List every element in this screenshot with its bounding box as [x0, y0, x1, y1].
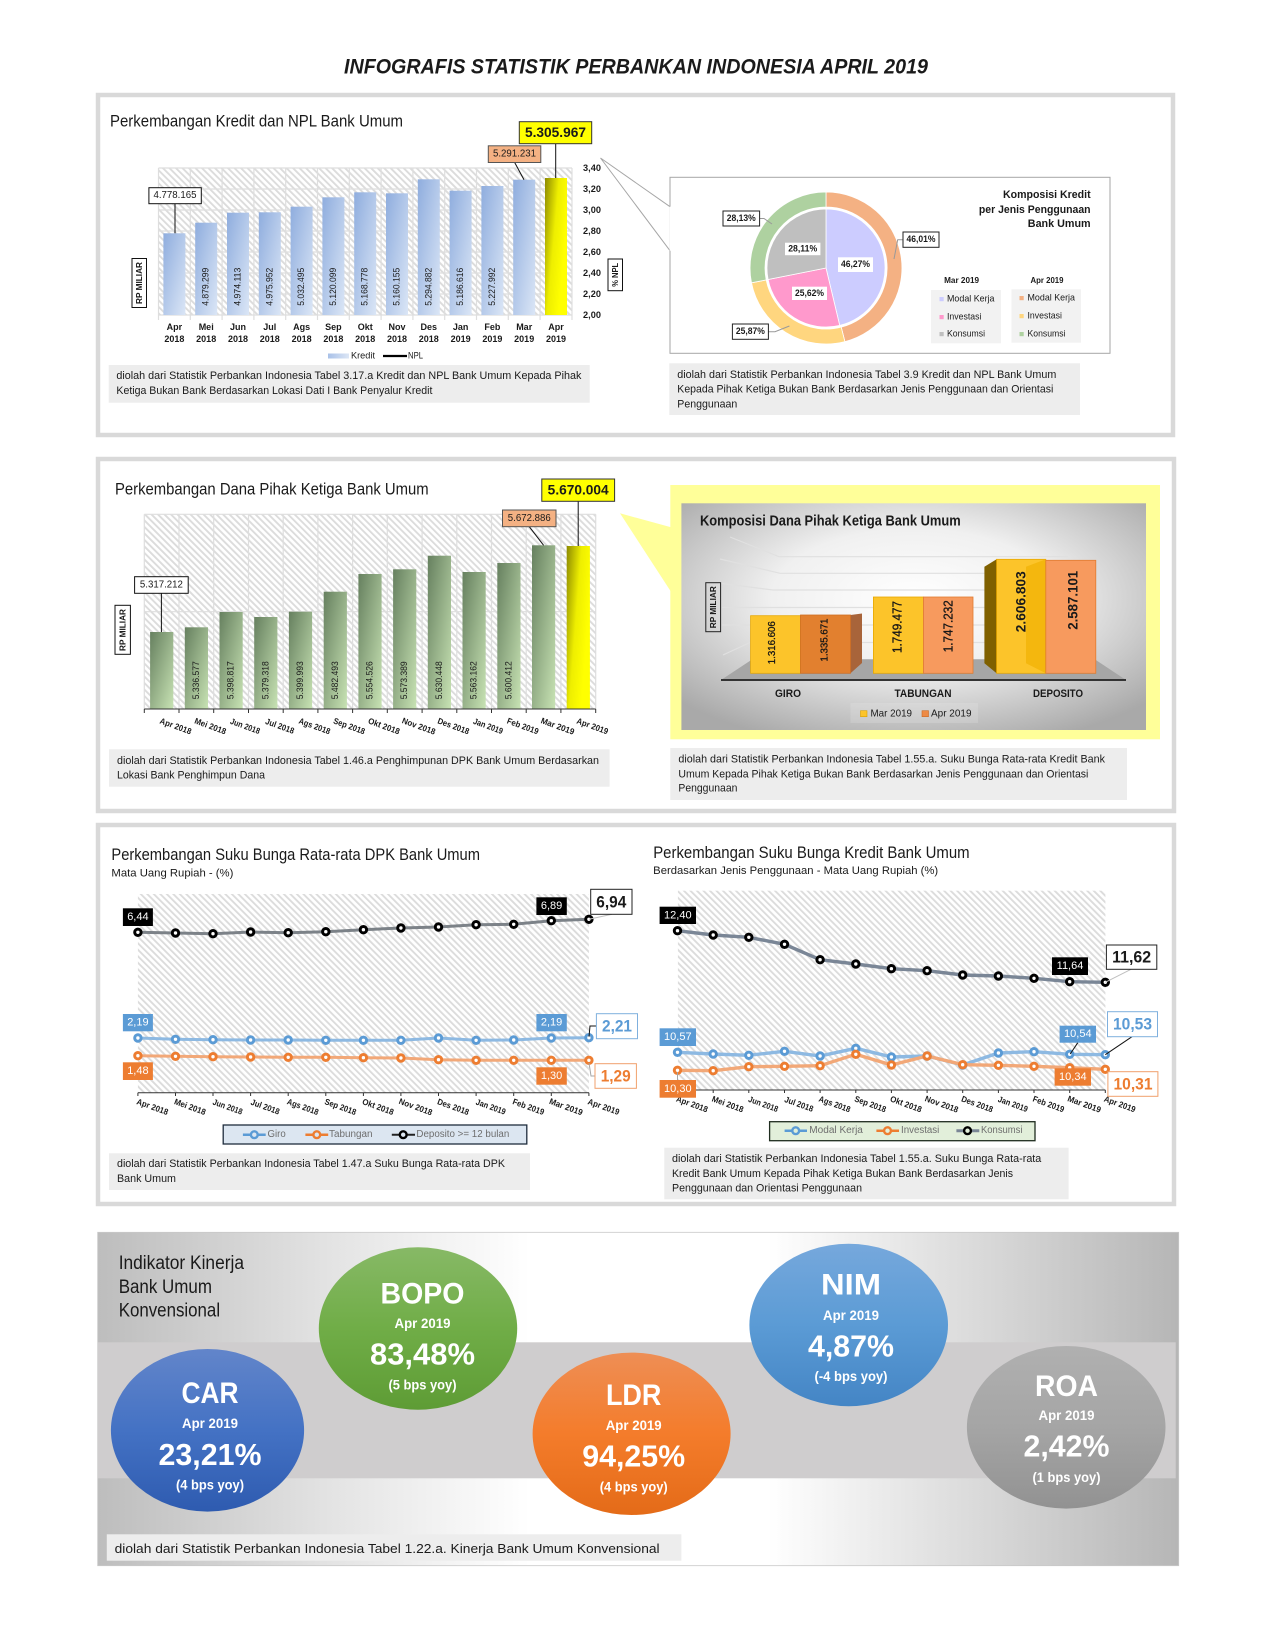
- bar chart: dpk: 5.398.817: [226, 661, 237, 699]
- metric: nim: (-4 bps yoy): [814, 1369, 888, 1384]
- heading: indikator: Bank Umum: [119, 1277, 212, 1298]
- bar chart: kredit: Okt: [358, 322, 373, 332]
- label: 25,62: 25,62%: [795, 288, 824, 299]
- bar chart: kredit: 5.186.616: [455, 268, 466, 306]
- line chart: suku bunga dpk: Okt 2018: [361, 1096, 396, 1117]
- bar chart: kredit: Apr: [548, 322, 564, 332]
- metric: bopo: BOPO: [380, 1278, 464, 1310]
- line chart: suku bunga kredit: Okt 2018: [889, 1094, 923, 1114]
- line chart: suku bunga dpk: Feb 2019: [511, 1096, 546, 1117]
- label: 46,27: 46,27%: [841, 259, 870, 270]
- note: kredit: [109, 365, 590, 403]
- legend: suku bunga kredit: Konsumsi: [981, 1125, 1022, 1136]
- bar chart: dpk: 5.630.448: [434, 661, 445, 699]
- data labels: suku bunga dpk: 1,48: [127, 1065, 149, 1077]
- legend: suku bunga kredit: Investasi: [901, 1125, 939, 1136]
- panel: komposisi dpk: [670, 485, 1160, 739]
- 3d bar chart: 2.587.101: [1064, 571, 1080, 630]
- label: 28,11: 28,11%: [788, 244, 818, 254]
- legend: apr 2019: [1011, 275, 1081, 343]
- bar chart: dpk: 5.554.526: [364, 661, 376, 699]
- bar chart: dpk: Okt 2018: [367, 716, 401, 736]
- callout: 5.317.212: 5.317.212: [140, 580, 183, 590]
- axis label: rp miliar dpk: [115, 605, 130, 654]
- metric: car: CAR: [182, 1377, 239, 1410]
- bar chart: kredit: Jan: [453, 322, 468, 332]
- line chart: suku bunga kredit: Ags 2018: [817, 1094, 852, 1114]
- data labels: suku bunga kredit: [660, 907, 1158, 1098]
- metric: ldr: Apr 2019: [606, 1418, 662, 1433]
- bar chart: kredit: 5.168.778: [360, 268, 371, 306]
- data labels: suku bunga kredit: 12,40: [664, 909, 692, 921]
- bar chart: dpk: 5.399.993: [295, 661, 306, 699]
- line chart: suku bunga dpk: Des 2018: [436, 1096, 471, 1117]
- legend: kredit npl: NPL: [408, 350, 423, 362]
- bar chart: dpk: Nov 2018: [401, 715, 437, 737]
- bar chart: kredit: 3,40: [583, 163, 601, 173]
- legend: apr 2019: Modal Kerja: [1028, 292, 1076, 304]
- bar chart: kredit: 4.974.113: [232, 268, 244, 306]
- line chart: suku bunga dpk: Sep 2018: [323, 1096, 358, 1117]
- metric: car: 23,21%: [158, 1437, 262, 1472]
- bar chart: dpk: Jul 2018: [264, 716, 296, 736]
- bar chart: dpk: 5.563.162: [469, 661, 480, 699]
- note: dpk: [109, 749, 610, 787]
- metric: bopo: [319, 1247, 517, 1410]
- metric: roa: [967, 1346, 1166, 1509]
- bar chart: dpk: Apr 2019: [575, 716, 610, 736]
- axis label: rp miliar dpk: RP MILIAR: [118, 609, 128, 651]
- metric: nim: 4,87%: [808, 1328, 894, 1364]
- heading: komposisi kredit: Komposisi Kredit: [1003, 189, 1091, 201]
- 3d bar chart: DEPOSITO: [1033, 688, 1083, 700]
- callout: 5.672.886: [502, 510, 556, 545]
- axis label: npl: % NPL: [610, 263, 620, 287]
- metric: ldr: LDR: [606, 1379, 662, 1412]
- bar chart: kredit: Sep: [325, 322, 342, 332]
- bar chart: kredit: 3,20: [583, 184, 601, 194]
- 3d bar chart: 1.747.232: [942, 600, 956, 652]
- legend: suku bunga dpk: Giro: [268, 1129, 286, 1140]
- heading: suku bunga dpk: [111, 845, 480, 879]
- legend: mar 2019: Konsumsi: [947, 328, 985, 340]
- bar chart: kredit: Jul: [263, 322, 276, 332]
- data labels: suku bunga dpk: 2,21: [602, 1017, 632, 1036]
- metric: nim: NIM: [821, 1268, 881, 1302]
- bar chart: kredit: 2,60: [583, 247, 601, 257]
- data labels: suku bunga kredit: 11,62: [1112, 948, 1151, 967]
- line chart: suku bunga dpk: Nov 2018: [398, 1096, 434, 1117]
- legend: 3d bars: Apr 2019: [931, 708, 972, 720]
- heading: indikator: Indikator Kinerja: [119, 1253, 244, 1274]
- note: suku bunga dpk: Bank Umum: [117, 1173, 176, 1185]
- line chart: suku bunga kredit: Apr 2018: [675, 1094, 710, 1114]
- data labels: suku bunga dpk: 6,89: [541, 900, 562, 912]
- metric: bopo: (5 bps yoy): [388, 1378, 456, 1392]
- bar chart: kredit: Mei: [199, 322, 214, 332]
- heading: suku bunga kredit: Berdasarkan Jenis Penggunaan - Mata Uang Rupiah (%): [653, 865, 938, 877]
- data labels: suku bunga dpk: 2,19: [127, 1017, 149, 1029]
- bar chart: kredit: 2019: [482, 334, 502, 344]
- panel: dana pihak ketiga: [98, 459, 1174, 811]
- bar chart: dpk: Sep 2018: [332, 716, 367, 736]
- metric: ldr: [533, 1353, 731, 1515]
- line chart: suku bunga kredit: Feb 2019: [1031, 1094, 1066, 1114]
- line chart: suku bunga kredit: Sep 2018: [853, 1094, 888, 1114]
- bar chart: kredit: 5.294.882: [423, 268, 434, 306]
- legend: suku bunga dpk: [223, 1125, 527, 1144]
- bar chart: kredit: Mar: [516, 322, 533, 332]
- callout pointer: komposisi dpk: [620, 513, 671, 592]
- data labels: suku bunga dpk: 6,94: [596, 892, 627, 911]
- line chart: suku bunga kredit: Apr 2019: [1103, 1094, 1137, 1114]
- metric: nim: [749, 1244, 948, 1406]
- bar chart: kredit: 4.879.299: [201, 268, 212, 306]
- bar chart: dpk: 5.600.412: [503, 661, 514, 699]
- 3d bar chart: [718, 537, 1126, 700]
- line chart: suku bunga dpk: Jul 2018: [249, 1097, 281, 1117]
- callout: 5.672.886: 5.672.886: [508, 513, 551, 524]
- line chart: suku bunga dpk: Jan 2019: [475, 1097, 507, 1117]
- legend: mar 2019: Modal Kerja: [947, 294, 995, 304]
- metric: ldr: 94,25%: [582, 1438, 685, 1474]
- bar chart: dpk: Jun 2018: [229, 716, 262, 736]
- axis label: rp miliar komposisi: RP MILIAR: [708, 586, 718, 628]
- line chart: suku bunga kredit: Jun 2018: [747, 1094, 780, 1114]
- bar chart: kredit: 2018: [196, 334, 216, 344]
- note: suku bunga dpk: diolah dari Statistik Perbankan Indonesia Tabel 1.47.a Suku Bunga Rata-rata DPK: [117, 1158, 506, 1170]
- bar chart: kredit: Jun: [230, 322, 246, 332]
- bar chart: kredit: 5.227.992: [487, 268, 498, 306]
- line chart: suku bunga dpk: Apr 2018: [135, 1096, 170, 1117]
- label: 46,01: 46,01%: [906, 234, 936, 245]
- 3d bar chart: 1.316.606: [766, 621, 778, 664]
- legend: suku bunga kredit: Modal Kerja: [809, 1125, 863, 1136]
- bar chart: kredit: 2018: [419, 334, 439, 344]
- donut chart: [750, 192, 902, 344]
- callout: 5.670.004: 5.670.004: [548, 483, 609, 498]
- metric: nim: Apr 2019: [823, 1308, 879, 1323]
- bar chart: kredit: 2019: [514, 334, 534, 344]
- bar chart: kredit: Ags: [293, 322, 310, 332]
- callout pointer: komposisi kredit: [600, 158, 670, 251]
- callout: 5.291.231: 5.291.231: [493, 149, 536, 160]
- line chart: suku bunga kredit: Nov 2018: [924, 1093, 960, 1115]
- data labels: suku bunga kredit: 10,53: [1113, 1015, 1152, 1034]
- bar chart: kredit: 2018: [323, 334, 343, 344]
- bar chart: dpk: [144, 514, 610, 737]
- panel: komposisi kredit: [670, 177, 1110, 353]
- bar chart: kredit: Apr: [167, 322, 183, 332]
- note: dpk: Lokasi Bank Penghimpun Dana: [117, 769, 266, 781]
- line chart: suku bunga dpk: Jun 2018: [211, 1097, 244, 1117]
- legend: apr 2019: Investasi: [1028, 310, 1062, 322]
- callout: 5.317.212: [135, 577, 188, 632]
- data labels: suku bunga kredit: 10,34: [1059, 1071, 1087, 1083]
- line chart: suku bunga dpk: Mar 2019: [548, 1096, 584, 1117]
- heading: dpk: Perkembangan Dana Pihak Ketiga Bank Umum: [115, 480, 429, 498]
- bar chart: kredit: 5.120.099: [328, 268, 339, 306]
- legend: 3d bars: [850, 703, 978, 723]
- bar chart: kredit: 2,80: [583, 226, 601, 236]
- bar chart: kredit: 2018: [292, 334, 312, 344]
- metric: car: Apr 2019: [182, 1416, 238, 1431]
- heading: suku bunga dpk: Mata Uang Rupiah - (%): [111, 867, 233, 879]
- metric: car: (4 bps yoy): [176, 1478, 244, 1492]
- bar chart: kredit: Des: [421, 322, 437, 332]
- bar chart: kredit: 2,40: [583, 268, 601, 278]
- note: suku bunga kredit: diolah dari Statistik Perbankan Indonesia Tabel 1.55.a. Suku Bunga Rata-rata: [672, 1153, 1042, 1165]
- metric: bopo: 83,48%: [370, 1336, 475, 1372]
- note: suku bunga kredit: Kredit Bank Umum Kepada Pihak Ketiga Bukan Bank Berdasarkan Jenis: [672, 1168, 1013, 1180]
- metric: roa: ROA: [1035, 1370, 1098, 1403]
- bar chart: dpk: 5.573.389: [399, 661, 410, 699]
- metric: roa: 2,42%: [1024, 1428, 1110, 1464]
- metric: roa: Apr 2019: [1038, 1408, 1094, 1423]
- line chart: suku bunga kredit: Des 2018: [960, 1094, 995, 1114]
- data labels: suku bunga dpk: 1,29: [601, 1066, 631, 1086]
- note: komposisi dpk: Penggunaan: [678, 783, 737, 795]
- metric: bopo: Apr 2019: [394, 1316, 450, 1331]
- legend: apr 2019: Konsumsi: [1028, 328, 1066, 340]
- label: 46,01: [894, 232, 939, 259]
- axis label: rp miliar: [132, 258, 146, 308]
- 3d bar chart: 1.749.477: [890, 601, 904, 653]
- heading: komposisi dpk: Komposisi Dana Pihak Ketiga Bank Umum: [700, 514, 961, 530]
- legend: suku bunga kredit: [770, 1122, 1035, 1141]
- bar chart: kredit: 2,20: [583, 289, 601, 299]
- bar chart: kredit: [158, 163, 601, 344]
- bar chart: kredit: 2018: [355, 334, 375, 344]
- bar chart: dpk: Mar 2019: [540, 715, 576, 737]
- note: kredit: diolah dari Statistik Perbankan Indonesia Tabel 3.17.a Kredit dan NPL Bank Umum Kepada Pihak: [116, 370, 582, 382]
- bar chart: dpk: Mei 2018: [193, 716, 228, 736]
- bar chart: kredit: 2018: [260, 334, 280, 344]
- legend: mar 2019: Investasi: [947, 312, 981, 322]
- legend: 3d bars: Mar 2019: [870, 708, 912, 720]
- bar chart: kredit: 5.032.495: [296, 268, 307, 306]
- heading: indikator: Konvensional: [119, 1300, 220, 1322]
- heading: komposisi kredit: per Jenis Penggunaan: [979, 204, 1091, 216]
- bar chart: dpk: Jan 2019: [472, 716, 505, 736]
- bar chart: dpk: Ags 2018: [297, 716, 332, 736]
- legend: mar 2019: Mar 2019: [944, 275, 979, 285]
- note: komposisi kredit: Penggunaan: [677, 398, 737, 410]
- bar chart: kredit: 4.975.952: [264, 268, 275, 306]
- note: komposisi kredit: diolah dari Statistik Perbankan Indonesia Tabel 3.9 Kredit dan NPL Bank Umum: [677, 369, 1056, 381]
- line chart: suku bunga dpk: Ags 2018: [286, 1096, 320, 1117]
- legend: kredit npl: [328, 350, 423, 362]
- data labels: suku bunga dpk: 6,44: [127, 911, 149, 923]
- note: suku bunga kredit: Penggunaan dan Orientasi Penggunaan: [672, 1182, 862, 1194]
- legend: apr 2019: Apr 2019: [1030, 275, 1064, 285]
- 3d bar chart: GIRO: [775, 688, 801, 700]
- line chart: suku bunga kredit: Mar 2019: [1066, 1093, 1103, 1115]
- axis label: npl: [608, 259, 622, 291]
- bar chart: dpk: 5.379.318: [260, 661, 271, 699]
- note: suku bunga dpk: [109, 1153, 530, 1190]
- heading: suku bunga kredit: [653, 843, 970, 877]
- metric: ldr: (4 bps yoy): [600, 1480, 668, 1494]
- legend: suku bunga dpk: Deposito >= 12 bulan: [416, 1129, 509, 1140]
- bar chart: dpk: 5.482.493: [330, 661, 341, 699]
- panel: suku bunga: [98, 825, 1174, 1204]
- label: 46,27: [838, 257, 873, 272]
- callout: 4.778.165: 4.778.165: [154, 190, 197, 201]
- callout: 5.291.231: [488, 146, 541, 180]
- heading: indikator: [119, 1253, 244, 1322]
- data labels: suku bunga kredit: 10,30: [664, 1083, 692, 1095]
- callout: 5.670.004: [542, 479, 615, 546]
- 3d bar chart: 2.606.803: [1013, 571, 1029, 632]
- data labels: suku bunga kredit: 10,57: [664, 1031, 692, 1043]
- callout: 5.305.967: 5.305.967: [525, 125, 586, 140]
- bar chart: kredit: 5.160.155: [392, 268, 402, 306]
- axis label: rp miliar: RP MILIAR: [134, 262, 144, 304]
- label: 28,13: 28,13%: [727, 213, 756, 224]
- line chart: suku bunga dpk: [135, 894, 621, 1117]
- bar chart: dpk: 5.336.577: [191, 661, 202, 699]
- note: komposisi dpk: diolah dari Statistik Perbankan Indonesia Tabel 1.55.a. Suku Bunga Rata-rata Kredit Bank: [678, 753, 1105, 765]
- bar chart: kredit: Feb: [484, 322, 501, 332]
- note: indikator: [107, 1534, 681, 1561]
- bar chart: kredit: 2019: [546, 334, 566, 344]
- label: 25,87: [732, 324, 789, 339]
- bar chart: kredit: 2019: [451, 334, 471, 344]
- heading: suku bunga dpk: Perkembangan Suku Bunga Rata-rata DPK Bank Umum: [111, 845, 480, 864]
- panel: kredit dan NPL: [98, 95, 1173, 435]
- note: indikator: diolah dari Statistik Perbankan Indonesia Tabel 1.22.a. Kinerja Bank Umum Konvensional: [115, 1541, 660, 1556]
- heading: suku bunga kredit: Perkembangan Suku Bunga Kredit Bank Umum: [653, 843, 970, 862]
- bar chart: kredit: 2018: [164, 334, 184, 344]
- heading: komposisi kredit: Bank Umum: [1028, 218, 1091, 230]
- panel: indikator kinerja: [98, 1232, 1179, 1566]
- data labels: suku bunga dpk: [123, 889, 637, 1088]
- line chart: suku bunga dpk: Apr 2019: [586, 1096, 621, 1117]
- 3d bar chart: 1.335.671: [819, 618, 831, 662]
- bar chart: kredit: 3,00: [583, 205, 601, 215]
- metric: roa: (1 bps yoy): [1032, 1470, 1100, 1485]
- heading: komposisi kredit: [979, 189, 1091, 230]
- line chart: suku bunga kredit: Mei 2018: [711, 1094, 745, 1114]
- bar chart: kredit: 2018: [228, 334, 248, 344]
- note: komposisi kredit: Kepada Pihak Ketiga Bukan Bank Berdasarkan Jenis Penggunaan dan Orientasi: [677, 383, 1053, 395]
- line chart: suku bunga kredit: Jul 2018: [783, 1094, 815, 1114]
- note: komposisi dpk: [670, 748, 1127, 800]
- legend: suku bunga dpk: Tabungan: [329, 1129, 372, 1140]
- bar chart: kredit: 2018: [387, 334, 407, 344]
- data labels: suku bunga dpk: 1,30: [541, 1070, 562, 1082]
- title: INFOGRAFIS STATISTIK PERBANKAN INDONESIA APRIL 2019: [344, 56, 928, 78]
- callout: 4.778.165: [149, 188, 201, 233]
- data labels: suku bunga kredit: 10,54: [1064, 1028, 1092, 1040]
- note: dpk: diolah dari Statistik Perbankan Indonesia Tabel 1.46.a Penghimpunan DPK Bank Umum Berdasarkan: [117, 755, 599, 767]
- note: komposisi kredit: [669, 363, 1080, 415]
- data labels: suku bunga kredit: 10,31: [1114, 1074, 1152, 1094]
- bar chart: dpk: Des 2018: [436, 716, 471, 736]
- 3d bar chart: TABUNGAN: [894, 688, 952, 700]
- bar chart: dpk: Feb 2019: [506, 716, 540, 736]
- note: komposisi dpk: Umum Kepada Pihak Ketiga Bukan Bank Berdasarkan Jenis Penggunaan dan Orientasi: [678, 768, 1088, 780]
- heading: kredit: Perkembangan Kredit dan NPL Bank Umum: [110, 112, 403, 130]
- bar chart: kredit: 2,00: [583, 310, 601, 320]
- legend: kredit npl: Kredit: [351, 350, 375, 362]
- line chart: suku bunga dpk: Mei 2018: [173, 1096, 208, 1117]
- label: 25,87: 25,87%: [736, 326, 765, 337]
- line chart: suku bunga kredit: Jan 2019: [997, 1094, 1029, 1114]
- legend: mar 2019: [931, 275, 1001, 343]
- note: kredit: Ketiga Bukan Bank Berdasarkan Lokasi Dati I Bank Penyalur Kredit: [116, 385, 432, 397]
- axis label: rp miliar komposisi: [706, 583, 721, 632]
- line chart: suku bunga kredit: [674, 891, 1137, 1115]
- metric: car: [111, 1349, 304, 1512]
- data labels: suku bunga dpk: 2,19: [541, 1017, 562, 1029]
- bar chart: dpk: Apr 2018: [158, 716, 193, 736]
- data labels: suku bunga kredit: 11,64: [1057, 960, 1083, 972]
- label: 28,13: [723, 211, 772, 226]
- note: suku bunga kredit: [664, 1148, 1069, 1199]
- bar chart: kredit: Nov: [388, 322, 406, 332]
- callout: 5.305.967: [519, 122, 592, 178]
